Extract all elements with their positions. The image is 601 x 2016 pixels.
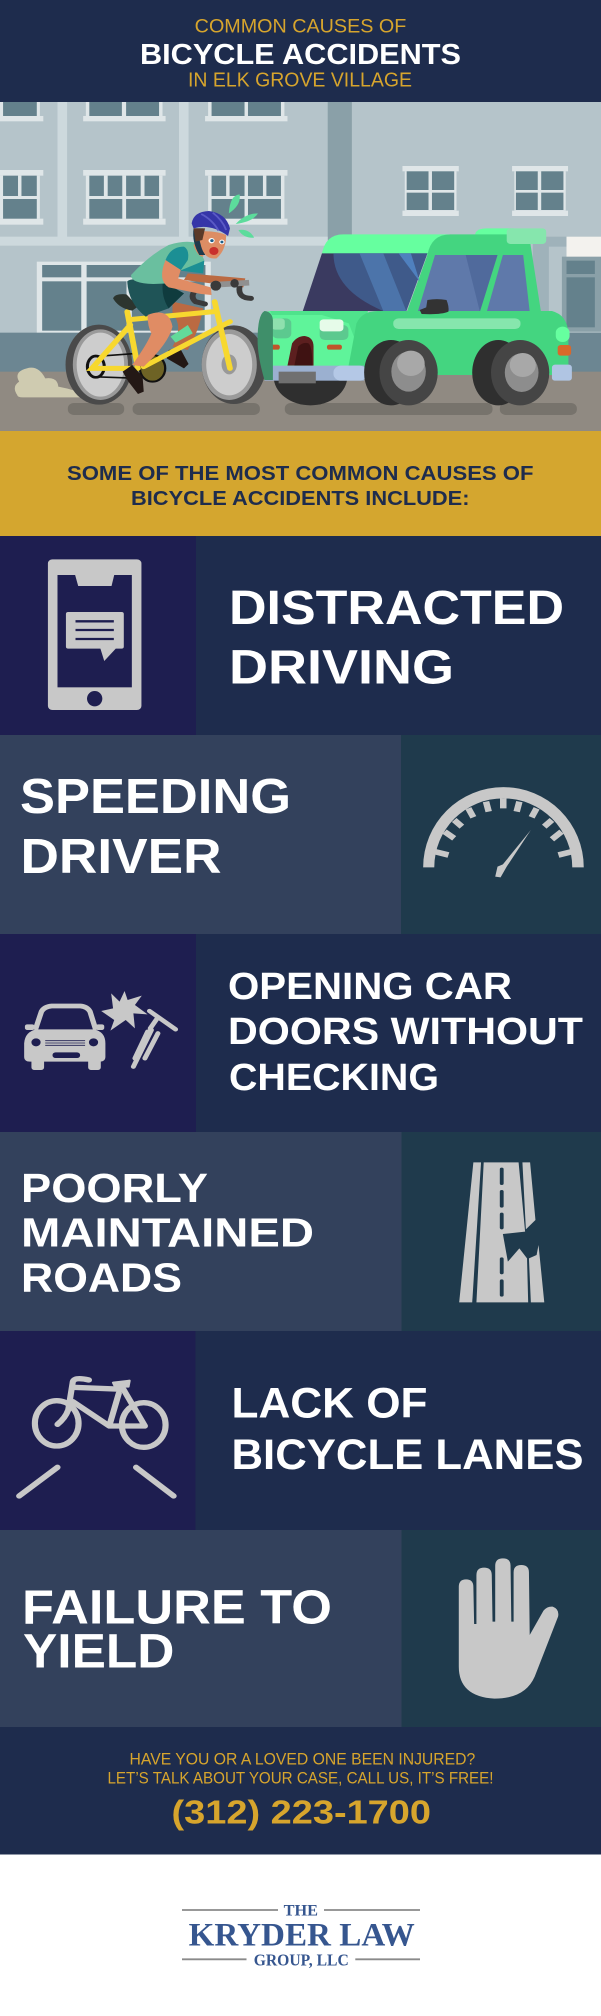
logo: The Kryder Law Group: GROUP, LLC [254, 1951, 349, 1970]
logo: The Kryder Law Group: THE [284, 1903, 318, 1920]
row: opening car doors [0, 934, 601, 1132]
cta line 2: LET’S TALK ABOUT YOUR CASE, CALL US, IT’S FREE! [108, 1768, 494, 1787]
icon: bicycle with lane lines [19, 1379, 174, 1496]
icon: cracked road [459, 1162, 544, 1302]
heading: opening car doors without checking: CHECKING [229, 1057, 439, 1099]
car [261, 228, 572, 405]
phone number: (312) 223-1700 [172, 1793, 431, 1830]
heading: lack of bicycle lanes: LACK OF [232, 1379, 428, 1427]
row: lack of bicycle lanes [0, 1331, 601, 1530]
cyclist on bicycle [15, 194, 273, 405]
heading: opening car doors without checking: DOORS WITHOUT [228, 1011, 583, 1053]
footer call to action [0, 1727, 601, 1854]
heading: opening car doors without checking [228, 966, 583, 1099]
title line 3: IN ELK GROVE VILLAGE [188, 69, 412, 91]
title line 2: BICYCLE ACCIDENTS [140, 39, 461, 71]
row: poorly maintained roads [0, 1132, 601, 1331]
heading: lack of bicycle lanes [232, 1379, 584, 1479]
banner line 2: BICYCLE ACCIDENTS INCLUDE: [131, 488, 470, 510]
row: distracted driving [0, 536, 601, 735]
logo: The Kryder Law Group: KRYDER LAW [189, 1918, 415, 1954]
title line 1: COMMON CAUSES OF [195, 15, 406, 37]
heading: opening car doors without checking: OPENING CAR [228, 966, 512, 1008]
heading: poorly maintained roads: MAINTAINED [21, 1210, 314, 1256]
illustration: cyclist colliding with green car [0, 102, 601, 432]
heading: speeding driver: DRIVER [20, 830, 222, 884]
header panel [0, 0, 601, 102]
row: speeding driver [0, 735, 601, 934]
heading: poorly maintained roads: ROADS [21, 1255, 182, 1301]
icon: car and bicycle collision [24, 991, 176, 1070]
heading: failure to yield: FAILURE TO [22, 1581, 332, 1634]
heading: speeding driver: SPEEDING [20, 770, 291, 824]
heading: failure to yield: YIELD [23, 1626, 174, 1679]
heading: distracted driving: DISTRACTED [229, 581, 564, 635]
heading: speeding driver [20, 770, 291, 884]
heading: poorly maintained roads: POORLY [21, 1165, 208, 1211]
row: failure to yield [0, 1530, 601, 1728]
heading: failure to yield [22, 1581, 332, 1679]
gold banner [0, 431, 601, 536]
banner line 1: SOME OF THE MOST COMMON CAUSES OF [67, 463, 534, 485]
icon: raised hand [459, 1558, 558, 1699]
cta line 1: HAVE YOU OR A LOVED ONE BEEN INJURED? [130, 1750, 475, 1769]
heading: distracted driving [229, 581, 564, 694]
logo: The Kryder Law Group [0, 1855, 601, 2016]
heading: distracted driving: DRIVING [229, 640, 454, 694]
icon: phone [48, 559, 141, 710]
heading: poorly maintained roads [21, 1165, 314, 1301]
icon: speedometer [423, 787, 584, 877]
heading: lack of bicycle lanes: BICYCLE LANES [232, 1431, 584, 1479]
